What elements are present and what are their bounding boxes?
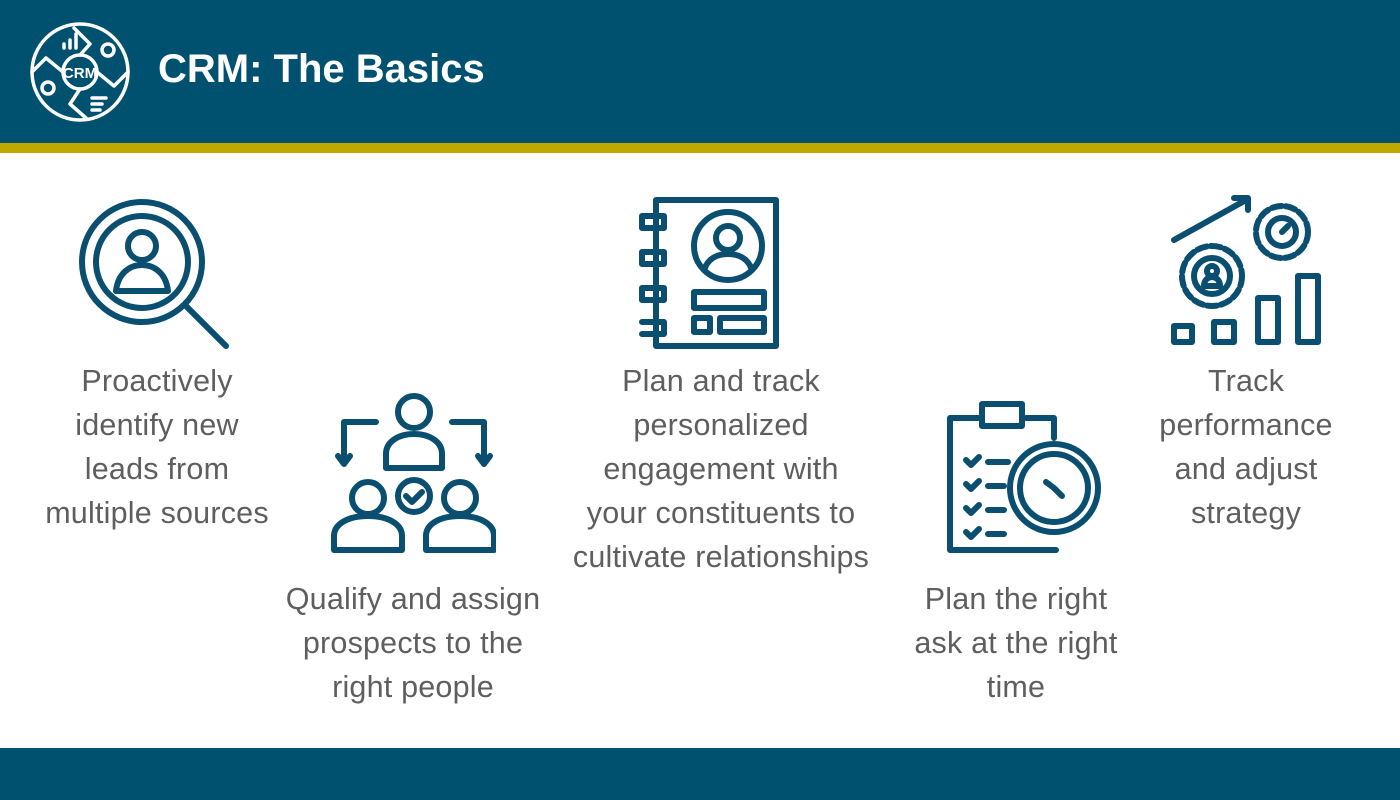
text: track performance: strategy (1191, 496, 1301, 530)
text: leads: leads from (85, 452, 229, 486)
text: qualify: prospects to the (303, 626, 523, 660)
title: CRM: The Basics (158, 47, 485, 91)
text: track performance: Track (1208, 364, 1284, 398)
icon: CRM logo (30, 22, 130, 122)
header bar (0, 0, 1400, 143)
footer bar (0, 748, 1400, 800)
text: qualify: right people (332, 670, 494, 704)
gold stripe (0, 143, 1400, 153)
text: right ask: Plan the right (925, 582, 1107, 616)
text: leads: Proactively (81, 364, 233, 398)
text: engagement: cultivate relationships (573, 540, 869, 574)
icon: team assign (331, 393, 496, 553)
icon: CRM logo: CRM (63, 65, 97, 82)
icon: notebook profile (639, 197, 779, 349)
icon: performance gears (1171, 195, 1321, 345)
text: leads: identify new (75, 408, 239, 442)
text: engagement: Plan and track (622, 364, 820, 398)
text: qualify (286, 582, 540, 704)
text: engagement: engagement with (603, 452, 839, 486)
text: track performance: and adjust (1175, 452, 1317, 486)
text: qualify: Qualify and assign (286, 582, 540, 616)
text: right ask: time (987, 670, 1045, 704)
text: right ask: ask at the right (914, 626, 1118, 660)
text: engagement (573, 364, 869, 574)
text: engagement: personalized (633, 408, 809, 442)
text: track performance (1159, 364, 1333, 530)
icon: clipboard with clock (947, 401, 1101, 553)
text: engagement: your constituents to (587, 496, 855, 530)
text: right ask (914, 582, 1118, 704)
text: track performance: performance (1159, 408, 1333, 442)
text: leads (45, 364, 269, 530)
icon: magnifier with person (79, 199, 229, 349)
text: leads: multiple sources (45, 496, 269, 530)
